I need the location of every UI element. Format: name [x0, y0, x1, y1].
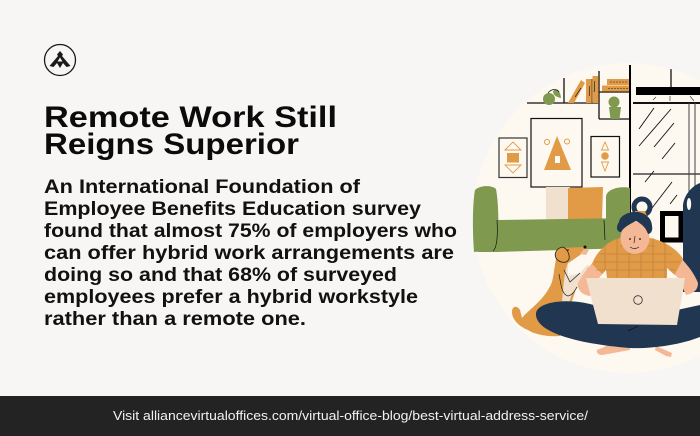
sofa	[473, 186, 630, 252]
body text: employees prefer a hybrid workstyle	[44, 286, 418, 308]
body text: found that almost 75% of employers who	[44, 220, 457, 242]
dark chair	[683, 183, 700, 292]
wall art frames	[499, 118, 620, 187]
illustration: person working on a laptop at home	[473, 63, 700, 373]
footer bar	[0, 396, 700, 436]
footer link text: Visit alliancevirtualoffices.com/virtual-office-blog/best-virtual-address-service/	[113, 409, 589, 423]
title: Reigns Superior	[44, 128, 299, 161]
body text: An International Foundation of	[44, 176, 361, 198]
body text: doing so and that 68% of surveyed	[44, 264, 397, 286]
body text: Employee Benefits Education survey	[44, 198, 421, 220]
woman	[536, 199, 700, 357]
shelves with plant and books	[527, 71, 629, 119]
body text: can offer hybrid work arrangements are	[44, 242, 454, 264]
body text: rather than a remote one.	[44, 308, 306, 330]
icon: company logo	[44, 44, 76, 76]
body text	[44, 176, 457, 330]
title	[44, 101, 337, 161]
illustration background circle	[473, 63, 700, 373]
dog	[512, 246, 596, 336]
window	[630, 65, 700, 240]
title: Remote Work Still	[44, 101, 337, 134]
